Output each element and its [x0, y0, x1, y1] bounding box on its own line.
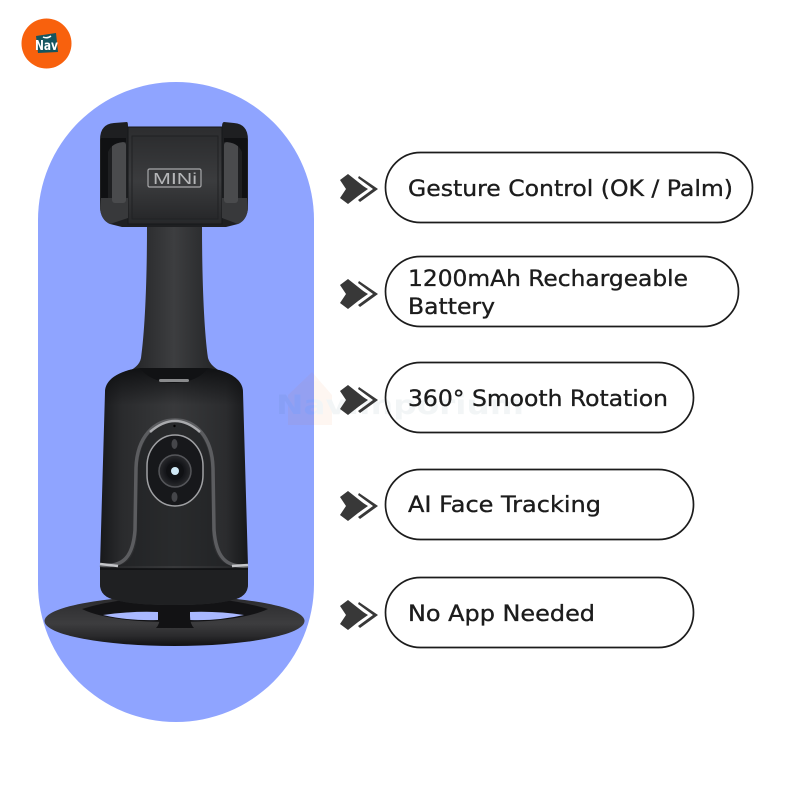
feature: battery: 1200mAh Rechargeable [408, 266, 688, 292]
MINi label [148, 169, 201, 188]
feature: battery [340, 256, 738, 326]
base disc [44, 596, 304, 646]
feature: 360 rotation [340, 362, 694, 432]
logo badge [22, 18, 72, 68]
silver trim [115, 421, 235, 566]
feature: no app: No App Needed [408, 601, 595, 627]
MINi label: MINi [153, 171, 197, 188]
logo badge: Nav [35, 39, 58, 54]
arrow icon [340, 491, 378, 521]
body [100, 368, 248, 605]
feature: no app [340, 578, 694, 648]
feature: gesture control [340, 152, 752, 222]
feature: gesture control: Gesture Control (OK / Palm) [408, 176, 733, 202]
blue capsule background [38, 82, 314, 722]
faint watermark [276, 372, 524, 425]
camera window [147, 435, 203, 506]
feature: face tracking [340, 470, 694, 540]
lens [159, 455, 191, 487]
phone clamp head [100, 122, 248, 227]
product: phone gimbal [44, 122, 304, 646]
feature: 360 rotation: 360° Smooth Rotation [408, 386, 668, 412]
feature: face tracking: AI Face Tracking [408, 492, 601, 518]
neck [118, 226, 230, 376]
faint watermark: NavImporium [276, 390, 524, 421]
feature: battery: Battery [408, 294, 495, 320]
arrow icon [340, 600, 378, 630]
arrow icon [340, 385, 378, 415]
arrow icon [340, 279, 378, 309]
arrow icon [340, 174, 378, 204]
